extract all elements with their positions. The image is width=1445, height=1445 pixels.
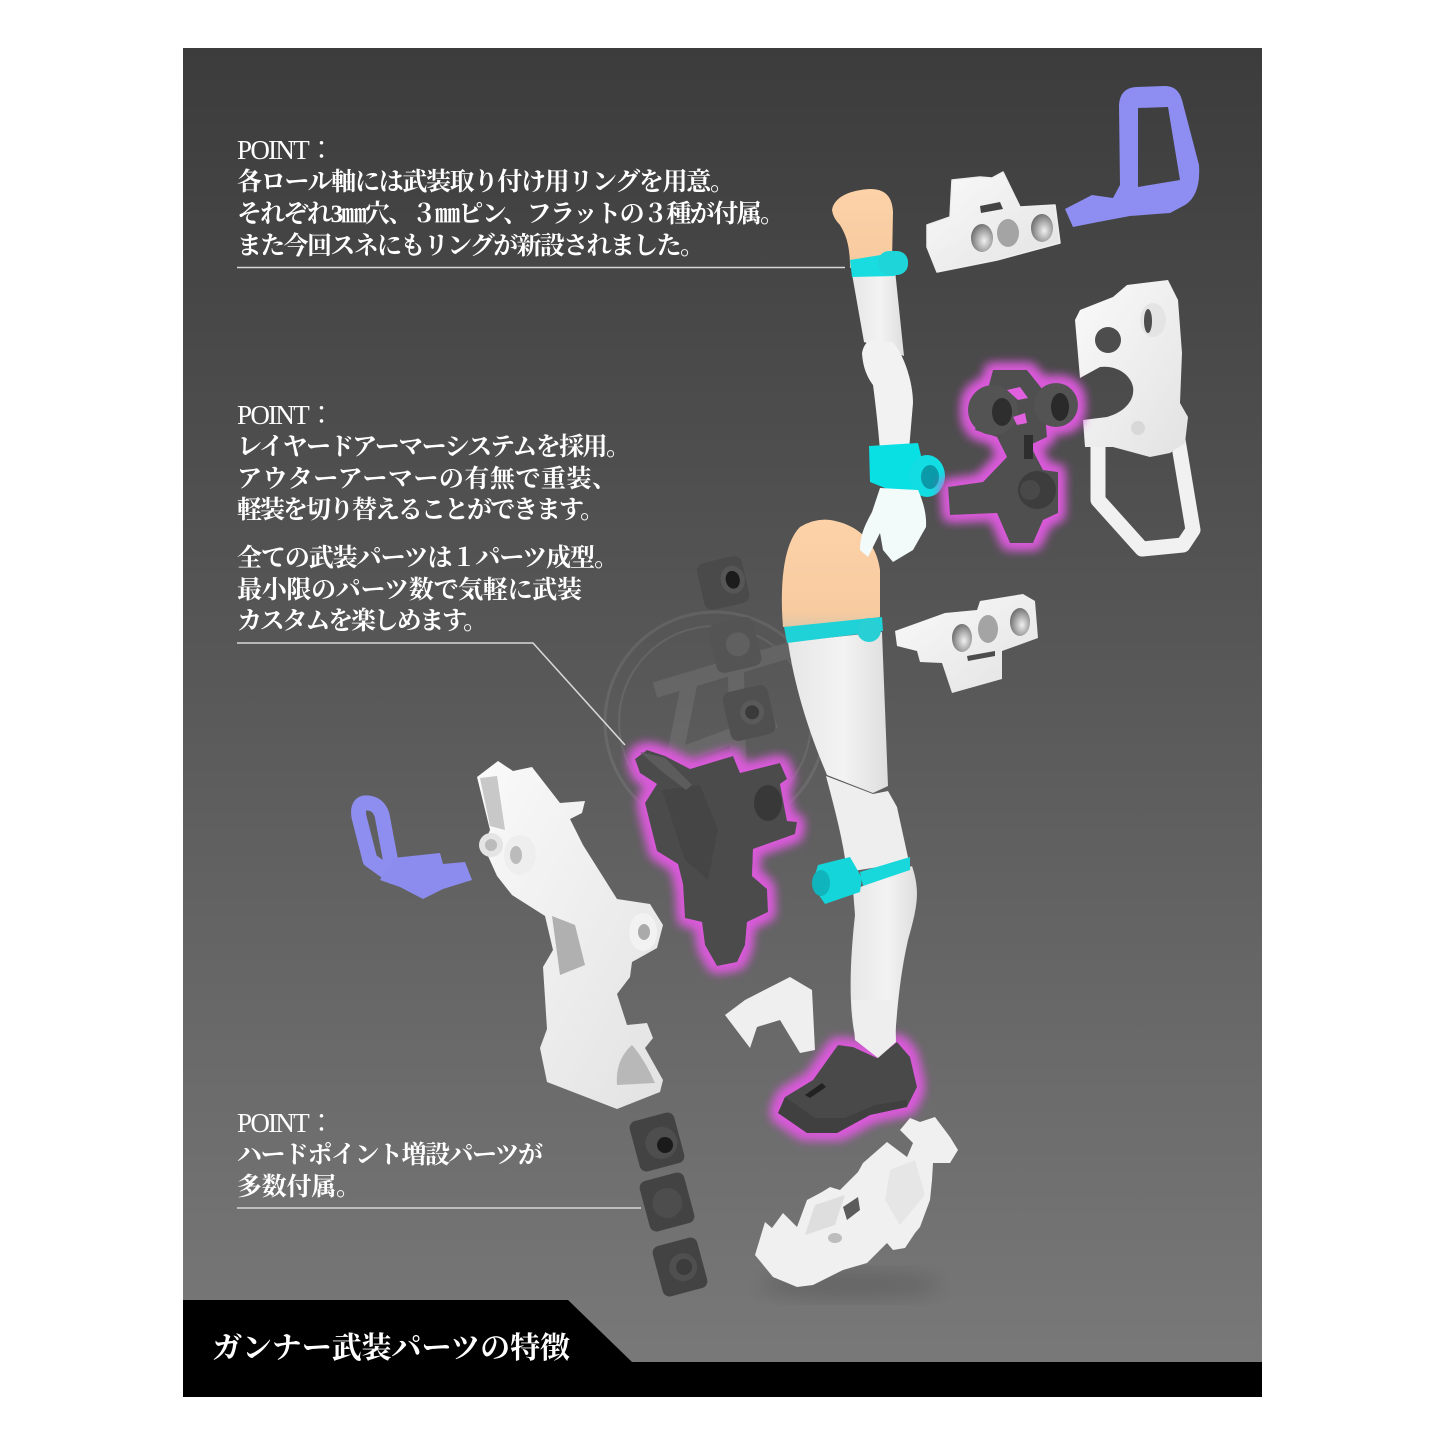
upper arm assembly bbox=[832, 189, 945, 497]
text block: point 2 bbox=[237, 400, 631, 635]
leg: lower cyan ring bbox=[812, 857, 910, 904]
watermark logo bbox=[605, 612, 825, 832]
upper hardpoint pegs bbox=[695, 554, 777, 743]
text block: point 1: 各ロール軸には武装取り付け用リングを用意。 bbox=[237, 168, 735, 196]
white leg armor bbox=[477, 761, 663, 1109]
top purple handle part bbox=[1065, 86, 1199, 227]
title banner bbox=[183, 1300, 1262, 1397]
small white armor piece bbox=[725, 977, 815, 1053]
text block: point 2: POINT： bbox=[237, 400, 335, 430]
arm: forearm bbox=[862, 340, 913, 450]
lower hardpoint pegs bbox=[628, 1111, 709, 1298]
text block: point 2: 最小限のパーツ数で気軽に武装 bbox=[237, 576, 582, 604]
leg assembly bbox=[782, 520, 917, 1058]
title: ガンナー武装パーツの特徴 bbox=[212, 1332, 570, 1365]
text block: point 2: 軽装を切り替えることができます。 bbox=[237, 496, 605, 524]
arm: wrist cyan connector bbox=[869, 443, 945, 497]
ground shadow bbox=[760, 1271, 940, 1299]
arm: upper arm bbox=[852, 270, 904, 356]
small purple handle part bbox=[359, 803, 472, 899]
leg: knee bbox=[826, 776, 909, 872]
highlighted gray arm armor bbox=[948, 370, 1078, 543]
text block: point 3: POINT： bbox=[237, 1108, 335, 1138]
leg: thigh bbox=[788, 632, 888, 793]
white gun part bbox=[1075, 280, 1193, 549]
text block: point 3: 多数付属。 bbox=[237, 1173, 361, 1201]
text block: point 3 bbox=[237, 1108, 543, 1201]
arm: skin shoulder bbox=[832, 189, 893, 268]
leader lines bbox=[237, 268, 845, 1208]
second white connector block bbox=[895, 594, 1038, 693]
text block: point 2: アウターアーマーの有無で重装、 bbox=[237, 465, 617, 493]
text block: point 3: ハードポイント増設パーツが bbox=[237, 1141, 543, 1169]
highlighted gray leg armor bbox=[635, 750, 797, 966]
leg: shin bbox=[851, 866, 917, 1058]
top white connector block bbox=[927, 172, 1060, 272]
text block: point 1: POINT： bbox=[237, 135, 335, 165]
shin ankle tip bbox=[852, 1000, 896, 1058]
text block: point 1: それぞれ3㎜穴、３㎜ピン、フラットの３種が付属。 bbox=[237, 200, 785, 228]
text block: point 2: レイヤードアーマーシステムを採用。 bbox=[237, 433, 631, 461]
highlighted black shoe bbox=[778, 1042, 917, 1133]
arm: upper cyan ring bbox=[850, 251, 908, 277]
text block: point 2: カスタムを楽しめます。 bbox=[237, 607, 488, 635]
text block: point 1 bbox=[237, 135, 785, 260]
text block: point 1: また今回スネにもリングが新設されました。 bbox=[237, 232, 705, 260]
white foot armor bbox=[755, 1117, 958, 1287]
background panel bbox=[183, 48, 1262, 1397]
hand overlapping the thigh bbox=[860, 488, 926, 562]
text block: point 2: 全ての武装パーツは１パーツ成型。 bbox=[237, 544, 619, 572]
leg: upper cyan ring bbox=[784, 617, 883, 643]
leg: thigh skin bbox=[782, 520, 880, 627]
